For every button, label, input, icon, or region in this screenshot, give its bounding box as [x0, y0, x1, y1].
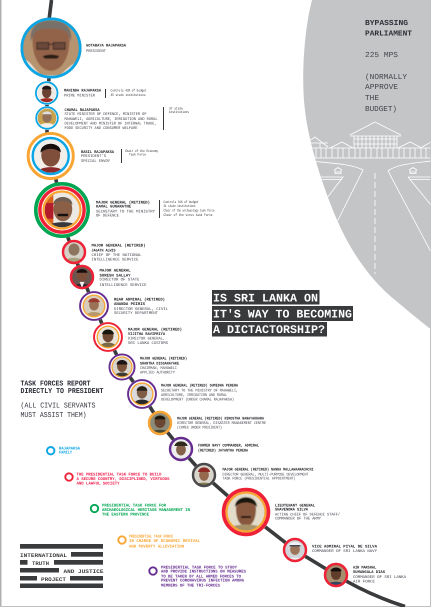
name and role: MAJOR GENERAL (RETIRED)	[140, 356, 187, 362]
person: Kamal Gunaratne	[34, 182, 214, 238]
person: Vijitha Ravipriya	[93, 322, 182, 352]
name and role	[64, 108, 158, 131]
name and role: FOOD SECURITY AND CONSUMER WELFARE	[64, 126, 138, 131]
legend: coronavirus task force: PRESIDENTIAL TASK FORCE TO STUDY	[161, 566, 238, 570]
name and role: PRESIDENT'S	[81, 154, 107, 159]
powers: Chair of the virus task force	[164, 213, 212, 218]
heading: bypassing parliament: PARLIAMENT	[365, 30, 412, 38]
portrait	[34, 182, 90, 238]
name and role	[114, 298, 169, 316]
heading: bypassing parliament	[365, 19, 412, 38]
powers: 31 state institutions	[164, 204, 196, 209]
text: 225 MPs: 225 MPS	[365, 51, 398, 60]
name and role: CHIEF OF THE NATIONAL	[92, 253, 142, 258]
name and role: MAJOR GENERAL (RETIRED)	[128, 328, 182, 332]
name and role: DEVELOPMENT (UNDER CHAMAL RAJAPAKSA)	[161, 398, 234, 402]
name and role	[161, 384, 239, 402]
legend: coronavirus task force: MEMBERS OF THE TRI-FORCES	[161, 584, 221, 588]
name and role: COMMANDER OF SRI LANKA NAVY	[312, 549, 378, 554]
name and role: MAJOR GENERAL (RETIRED) NANDA MALLAWAARACHCHI	[222, 468, 314, 472]
name and role	[312, 544, 378, 554]
legend: secure country task force: A SECURE COUNTRY, DISCIPLINED, VIRTUOUS	[76, 477, 170, 482]
legend: secure country task force: AND LAWFUL SOCIETY	[76, 482, 120, 486]
icon: parliament building and roads	[306, 122, 431, 274]
name and role: GOTABAYA RAJAPAKSA	[86, 44, 127, 48]
name and role	[86, 44, 127, 54]
text: normally approve the budget: BUDGET)	[365, 105, 397, 114]
person: Shantha Dissanayake	[108, 354, 187, 380]
name and role: SECRETARY TO THE MINISTRY OF MAHAWELI,	[161, 388, 238, 394]
person: Sumangala Dias	[324, 563, 407, 587]
person: Basil Rajapaksa	[27, 132, 159, 180]
heading: task forces report directly to president: DIRECTLY TO PRESIDENT	[20, 388, 104, 396]
text: all civil servants must assist them	[20, 402, 96, 420]
name and role: STATE MINISTER OF DEFENCE, MINISTER OF	[64, 112, 147, 117]
portrait	[62, 240, 86, 264]
name and role: INTELLIGENCE SERVICE	[92, 258, 139, 262]
powers: 35 state institutions	[110, 93, 146, 98]
portrait	[20, 18, 82, 78]
name and role	[81, 150, 115, 164]
portrait	[35, 81, 59, 105]
heading: task forces report directly to president	[20, 380, 104, 396]
name and role: REAR ADMIRAL (RETIRED)	[114, 298, 165, 302]
person: Chamal Rajapaksa	[35, 106, 189, 131]
name and role	[198, 444, 260, 454]
person: Mahinda Rajapaksa	[35, 81, 147, 105]
name and role: PRIME MINISTER	[64, 94, 96, 98]
text: all civil servants must assist them: MUST ASSIST THEM)	[20, 411, 86, 420]
powers	[121, 149, 159, 163]
portrait	[70, 265, 94, 289]
name and role: AIR FORCE	[353, 580, 376, 584]
name and role: MAJOR GENERAL (RETIRED) SUMEDHA PERERA	[161, 384, 239, 388]
name and role: MAHAWELI, AGRICULTURE, IRRIGATION AND RURAL	[64, 117, 158, 122]
powers: Chair of the archaeology task force	[164, 208, 214, 214]
name and role: CHAMAL RAJAPAKSA	[64, 108, 100, 113]
name and role	[177, 416, 266, 430]
legend: economic revival task force: AND POVERTY ALLEVIATION	[129, 544, 185, 550]
portrait	[169, 437, 193, 461]
name and role: SHANTHA DISSANAYAKE	[140, 362, 180, 366]
person: Jagath Alwis	[62, 240, 145, 264]
powers: 37 state	[169, 106, 183, 112]
portrait	[93, 322, 123, 352]
name and role: SUMANGALA DIAS	[353, 570, 386, 575]
name and role: MAJOR GENERAL (RETIRED)	[92, 244, 146, 248]
name and role: DIRECTOR GENERAL, DISASTER MANAGEMENT CENTRE	[177, 421, 266, 426]
name and role: VICE ADMIRAL PIYAL DE SILVA	[312, 544, 378, 550]
text: normally approve the budget: APPROVE	[365, 83, 398, 92]
powers: Task Force	[129, 152, 146, 158]
logo: International Truth and Justice Project: TRUTH	[32, 561, 49, 567]
legend: coronavirus task force: TO BE TAKEN BY ALL ARMED FORCES TO	[161, 574, 242, 580]
legend: secure country task force	[65, 472, 170, 486]
portrait	[192, 463, 216, 487]
heading: bypassing parliament: BYPASSING	[365, 19, 408, 28]
person: Ananda Peiris	[79, 291, 169, 321]
name and role: TASK FORCE (PRESIDENTIAL APPOINTMENT)	[222, 476, 296, 482]
logo: International Truth and Justice Project: AND JUSTICE	[64, 569, 104, 575]
name and role: AGRICULTURE, IRRIGATION AND RURAL	[161, 393, 227, 398]
name and role: INTELLIGENCE SERVICE	[100, 283, 147, 288]
portrait	[79, 291, 109, 321]
name and role: DIRECTOR GENERAL, MULTI-PURPOSE DEVELOPMENT	[222, 472, 309, 478]
heading: task forces report directly to president: TASK FORCES REPORT	[20, 380, 91, 388]
name and role: SRI LANKA CUSTOMS	[128, 341, 169, 346]
name and role: SHAVENDRA SILVA	[275, 508, 309, 512]
legend: Rajapaksa family: FAMILY	[59, 450, 72, 456]
legend: economic revival task force	[118, 534, 201, 550]
person: Sumedha Perera	[127, 379, 239, 409]
text: all civil servants must assist them: (ALL CIVIL SERVANTS	[20, 402, 96, 410]
legend: coronavirus task force: PREVENT CORONAVIRUS INFECTION AMONG	[161, 578, 245, 584]
person: Shavendra Silva	[222, 488, 341, 536]
logo: International Truth and Justice Project: INTERNATIONAL	[20, 553, 67, 559]
name and role: VIJITHA RAVIPRIYA	[128, 332, 166, 337]
name and role	[128, 328, 182, 346]
powers	[105, 88, 146, 98]
name and role: KAMAL GUNARATNE	[96, 204, 132, 210]
name and role: MAJOR GENERAL	[100, 268, 131, 274]
text: normally approve the budget: THE	[365, 95, 379, 103]
name and role: MAJOR GENERAL (RETIRED) NIROSTHA NANAYAKKARA	[177, 416, 264, 422]
portrait	[148, 411, 172, 435]
powers	[163, 106, 189, 130]
name and role: FORMER NAVY COMMANDER, ADMIRAL	[198, 444, 260, 448]
logo: International Truth and Justice Project: PROJECT	[41, 577, 67, 583]
main title: IT'S WAY TO BECOMING	[213, 308, 352, 322]
person: Nanda Mallawaarachchi	[192, 463, 314, 487]
name and role: DIRECTOR GENERAL,	[128, 336, 165, 342]
name and role: PRESIDENT	[86, 49, 107, 54]
person: Nirostha Nanayakkara	[148, 411, 266, 435]
name and role	[140, 356, 187, 376]
powers	[159, 200, 214, 218]
name and role: LIEUTENANT GENERAL	[275, 504, 316, 508]
name and role: DIRECTOR OF STATE	[100, 278, 140, 282]
name and role: SECURITY DEPARTMENT	[114, 311, 159, 316]
name and role: MAJOR GENERAL (RETIRED)	[96, 200, 150, 206]
name and role: (COMES UNDER PRESIDENT)	[177, 426, 222, 430]
name and role: SECRETARY TO THE MINISTRY	[96, 210, 156, 214]
name and role: COMMANDER OF SRI LANKA	[353, 575, 407, 580]
name and role: AIR MARSHAL	[353, 566, 377, 570]
powers: institutions	[169, 110, 189, 115]
name and role: SPECIAL ENVOY	[81, 159, 111, 164]
main title: A DICTACTORSHIP?	[213, 324, 325, 337]
name and role: COMMANDER OF THE ARMY	[275, 516, 322, 522]
powers: Controls 31% of budget	[164, 200, 198, 205]
name and role: CHAIRMAN, MAHAWELI	[140, 366, 177, 371]
powers: Chair of the Economy	[125, 149, 159, 154]
name and role: DEVELOPMENT AND MINISTER OF INTERNAL TRADE,	[64, 121, 156, 126]
portrait	[127, 379, 157, 409]
person: Piyal De Silva	[283, 538, 378, 562]
person: Jayantha Perera	[169, 437, 260, 461]
person: Suresh Sallay	[70, 265, 147, 289]
portrait	[283, 538, 307, 562]
name and role	[96, 200, 156, 218]
portrait	[27, 132, 75, 180]
name and role: (RETIRED) JAYANTHA PERERA	[198, 448, 248, 454]
main title	[212, 290, 353, 337]
legend: coronavirus task force	[149, 566, 247, 588]
main title: IS SRI LANKA ON	[213, 292, 318, 306]
name and role: BASIL RAJAPAKSA	[81, 150, 115, 155]
name and role: ACTING CHIEF OF DEFENCE STAFF/	[275, 512, 341, 518]
panel: bypassing parliament grey shape	[303, 0, 431, 329]
name and role: OF DEFENCE	[96, 214, 120, 218]
portrait	[324, 563, 348, 587]
portrait	[222, 488, 270, 536]
legend: secure country task force: THE PRESIDENTIAL TASK FORCE TO BUILD	[76, 472, 162, 478]
portrait	[108, 354, 136, 380]
name and role	[100, 268, 147, 288]
portrait	[35, 106, 59, 130]
legend: archaeological heritage task force: ARCHAEOLOGICAL HERITAGE MANAGEMENT IN	[102, 508, 191, 513]
legend: archaeological heritage task force: PRESIDENTIAL TASK FORCE FOR	[102, 504, 167, 508]
name and role	[222, 468, 314, 482]
powers: Controls 43% of budget	[110, 88, 146, 94]
text: normally approve the budget	[365, 73, 407, 114]
name and role	[64, 88, 102, 98]
legend: coronavirus task force: AND PROVIDE INSTRUCTIONS ON MEASURES	[161, 570, 247, 574]
legend: Rajapaksa family: RAJAPAKSA	[59, 446, 81, 452]
name and role	[353, 566, 407, 584]
legend: economic revival task force: IN CHARGE OF ECONOMIC REVIVAL	[129, 539, 201, 544]
name and role	[92, 244, 146, 262]
name and role: SURESH SALLAY	[100, 274, 131, 278]
person: Gotabaya Rajapaksa	[20, 18, 127, 78]
name and role: MAHINDA RAJAPAKSA	[64, 88, 102, 94]
legend: archaeological heritage task force	[91, 504, 191, 518]
legend: archaeological heritage task force: THE EASTERN PROVINCE	[102, 512, 150, 518]
name and role	[275, 504, 341, 522]
name and role: DIRECTOR GENERAL, CIVIL	[114, 307, 169, 312]
text: normally approve the budget: (NORMALLY	[365, 73, 407, 82]
name and role: APPLIED AUTHORITY	[140, 370, 176, 376]
name and role: ANANDA PEIRIS	[114, 302, 146, 307]
legend: Rajapaksa family	[47, 446, 81, 456]
legend: economic revival task force: PRESIDENTIAL TASK FORCE	[129, 534, 173, 540]
name and role: JAGATH ALWIS	[92, 248, 116, 254]
logo: International Truth and Justice Project	[20, 544, 104, 588]
